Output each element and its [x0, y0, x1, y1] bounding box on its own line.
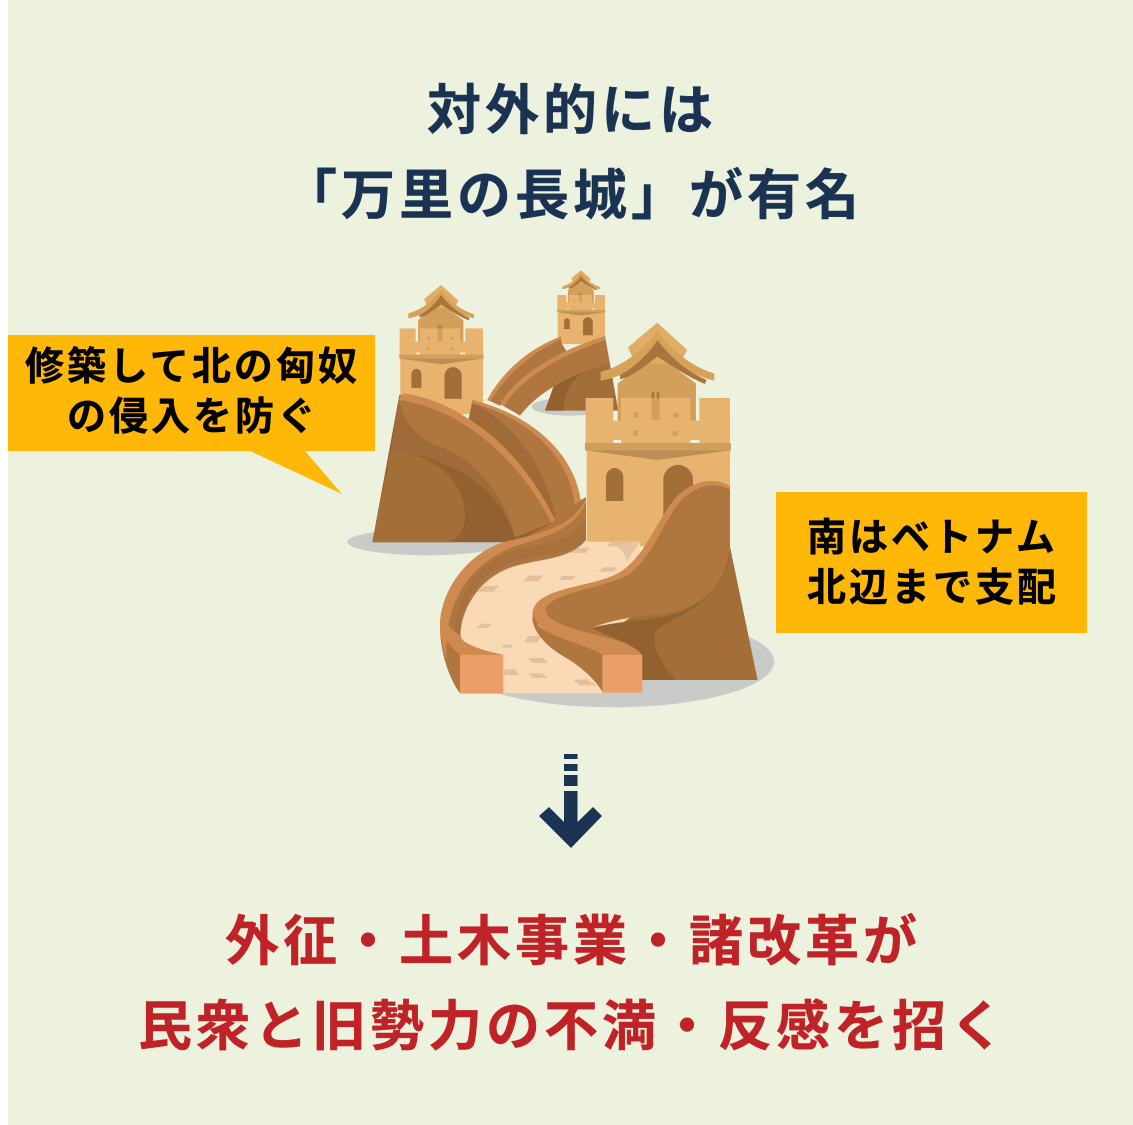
road	[460, 542, 642, 693]
title line 2: 「万里の長城」が有名	[283, 166, 863, 226]
conclusion	[138, 912, 1008, 1056]
shadows	[347, 398, 774, 707]
title line 1: 対外的には	[427, 80, 717, 140]
wall end blocks	[460, 655, 642, 694]
left tower	[399, 285, 484, 414]
front-left wall	[440, 498, 586, 693]
back tower	[487, 270, 618, 416]
callout south line 2: 北辺まで支配	[807, 567, 1059, 610]
callout: south	[776, 492, 1087, 633]
left hill	[372, 393, 586, 542]
front tower	[585, 323, 731, 547]
conclusion line 2: 民衆と旧勢力の不満・反感を招く	[138, 996, 1008, 1056]
front-right hill and wall	[532, 481, 758, 692]
callout south line 1: 南はベトナム	[807, 517, 1058, 560]
title	[283, 80, 863, 226]
callout north text	[25, 346, 360, 439]
callout north line 1: 修築して北の匈奴	[25, 346, 360, 389]
conclusion line 1: 外征・土木事業・諸改革が	[225, 912, 921, 972]
callout north line 2: の侵入を防ぐ	[67, 396, 319, 439]
